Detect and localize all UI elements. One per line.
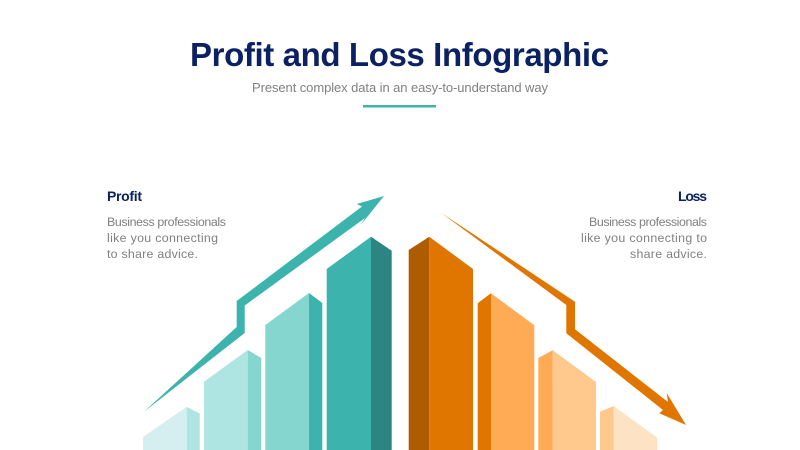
profit bar 2 <box>204 350 261 450</box>
profit description <box>107 215 226 261</box>
profit description: to share advice. <box>107 247 198 261</box>
loss bar 2 <box>478 293 534 450</box>
subtitle: Present complex data in an easy-to-understand way <box>252 80 548 95</box>
profit description: like you connecting <box>107 231 218 245</box>
loss bar 4 <box>600 406 657 450</box>
loss description: Business professionals <box>589 215 707 229</box>
profit bar 1 <box>143 407 200 450</box>
profit heading: Profit <box>107 188 142 204</box>
loss description: like you connecting to <box>581 231 707 245</box>
panel: loss text <box>581 188 707 261</box>
loss bar 3 <box>538 350 596 450</box>
loss heading: Loss <box>678 188 707 204</box>
profit bar 3 <box>265 293 322 450</box>
profit bar 4 <box>327 237 392 450</box>
chart: loss bars <box>409 237 657 450</box>
panel: profit text <box>107 188 226 261</box>
chart: profit bars <box>143 237 392 450</box>
loss description <box>581 215 707 261</box>
title: Profit and Loss Infographic <box>190 36 609 73</box>
loss description: share advice. <box>630 247 707 261</box>
title underline <box>363 105 436 108</box>
loss bar 1 <box>409 237 473 450</box>
arrow: loss falling <box>441 213 686 425</box>
arrow: profit rising <box>144 196 384 412</box>
profit description: Business professionals <box>107 215 226 229</box>
